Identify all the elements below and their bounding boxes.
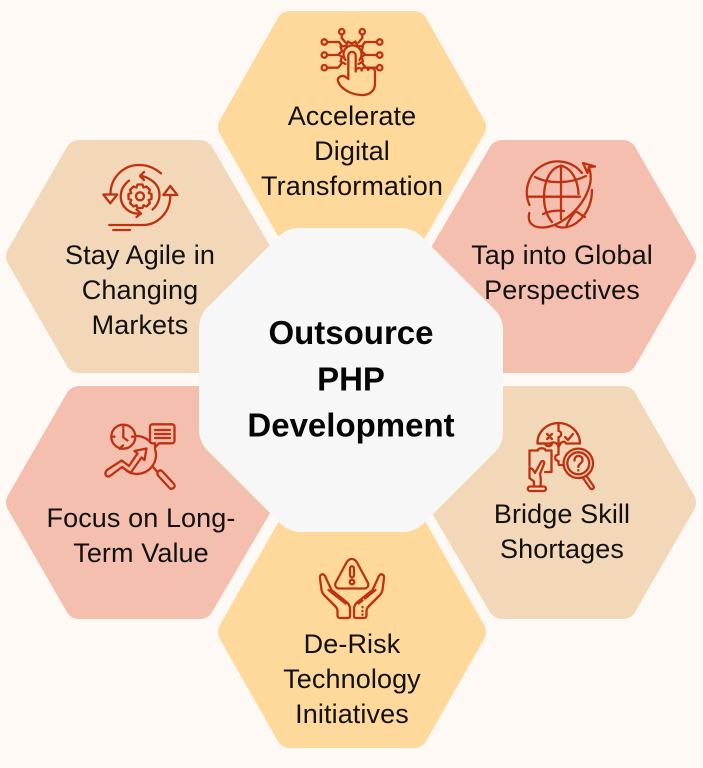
icon: agile cycle gear <box>103 165 177 230</box>
title <box>247 314 455 444</box>
label: Focus on Long- <box>46 503 236 533</box>
title: Development <box>247 406 455 444</box>
panel: tap into global perspectives <box>442 154 682 359</box>
icon: puzzle and magnifier <box>528 423 594 491</box>
label: Tap into Global <box>471 240 653 270</box>
label: Initiatives <box>295 699 409 729</box>
hexagon: upper left <box>20 154 260 359</box>
title: Outsource <box>268 314 434 351</box>
label: Digital <box>314 136 390 166</box>
label: Markets <box>92 310 188 340</box>
label: Perspectives <box>484 275 640 305</box>
label: Accelerate <box>288 101 416 131</box>
panel: center octagon <box>229 258 473 502</box>
icon: hands protecting warning <box>320 559 384 618</box>
title: PHP <box>317 360 385 398</box>
hexagon: upper right <box>442 154 682 359</box>
octagon <box>229 258 473 502</box>
label <box>46 503 236 568</box>
hexagon: bottom <box>232 530 472 734</box>
label: Technology <box>283 664 421 694</box>
panel: focus on long-term value <box>20 400 260 605</box>
label: Changing <box>82 275 198 305</box>
panel: bridge skill shortages <box>442 400 682 605</box>
label <box>65 240 215 340</box>
label <box>494 499 630 564</box>
label: Term Value <box>73 538 209 568</box>
hexagon: lower left <box>20 400 260 605</box>
icon: clock, trend and magnifier <box>105 424 175 489</box>
label: Transformation <box>261 171 443 201</box>
label: De-Risk <box>304 629 401 659</box>
label: Bridge Skill <box>494 499 630 529</box>
label: Stay Agile in <box>65 240 215 270</box>
hexagon: top <box>232 25 472 229</box>
panel: de-risk technology initiatives <box>232 530 472 734</box>
label <box>471 240 653 305</box>
label <box>283 629 421 729</box>
panel: accelerate digital transformation <box>232 25 472 229</box>
icon: touch circuit <box>322 29 382 95</box>
label <box>261 101 443 201</box>
label: Shortages <box>500 534 624 564</box>
icon: globe with orbit <box>527 161 595 228</box>
hexagon: lower right <box>442 400 682 605</box>
panel: stay agile in changing markets <box>20 154 260 359</box>
